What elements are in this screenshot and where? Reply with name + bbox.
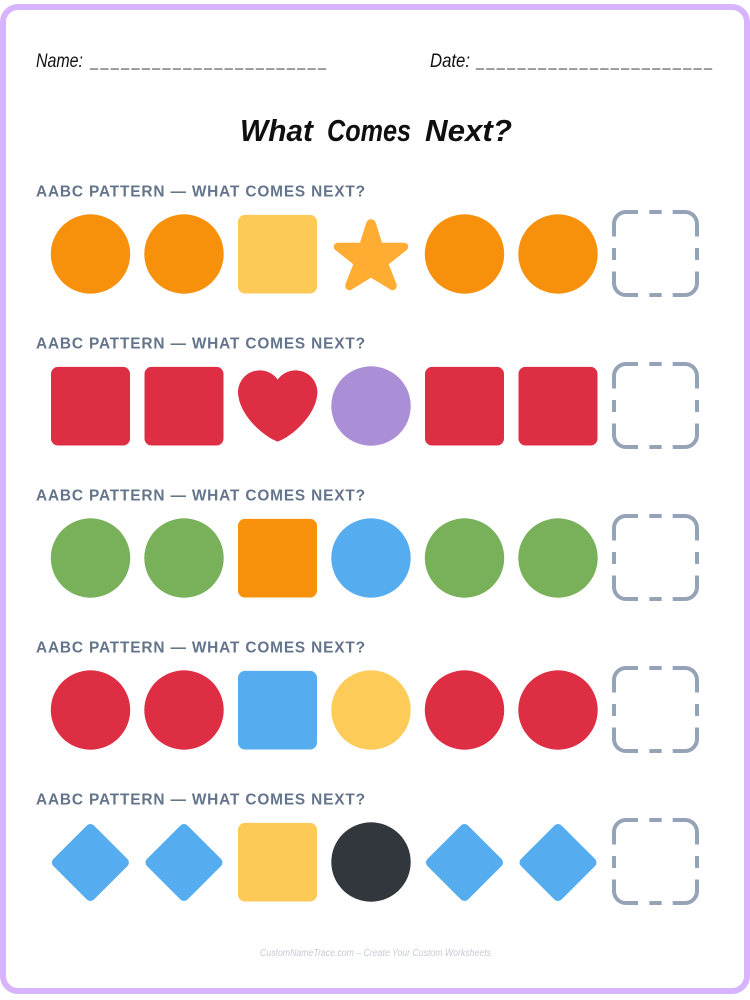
orange circle: [425, 214, 504, 294]
pattern row 4: [36, 640, 697, 751]
answer box: [614, 516, 697, 599]
blue circle: [331, 518, 411, 598]
answer box: [614, 820, 697, 903]
red circle: [425, 670, 504, 750]
name field: _______________________: [89, 54, 328, 70]
green circle: [518, 518, 598, 598]
green circle: [425, 518, 504, 598]
red circle: [51, 670, 130, 750]
green circle: [144, 518, 224, 598]
purple circle: [331, 366, 411, 446]
row label: AABC PATTERN — WHAT COMES NEXT?: [36, 184, 365, 201]
red square: [518, 367, 598, 446]
blue diamond: [143, 822, 225, 903]
title: Comes: [327, 113, 411, 148]
row label: AABC PATTERN — WHAT COMES NEXT?: [36, 336, 365, 353]
answer box: [614, 668, 697, 751]
yellow square: [238, 823, 317, 902]
title: What: [240, 113, 315, 148]
answer box: [614, 212, 697, 295]
red circle: [144, 670, 224, 750]
date field: Date:: [430, 51, 470, 72]
pattern row 1: [36, 184, 697, 295]
red heart: [238, 370, 317, 442]
orange star: [334, 219, 408, 290]
red square: [144, 367, 224, 446]
orange circle: [144, 214, 224, 294]
orange square: [238, 519, 317, 598]
red square: [51, 367, 130, 446]
answer box: [614, 364, 697, 447]
title: Next?: [425, 113, 512, 148]
row label: AABC PATTERN — WHAT COMES NEXT?: [36, 640, 365, 657]
pattern row 3: [36, 488, 697, 599]
footer: CustomNameTrace.com – Create Your Custom Worksheets: [260, 948, 491, 959]
red square: [425, 367, 504, 446]
green circle: [51, 518, 130, 598]
yellow square: [238, 215, 317, 294]
name field: Name:: [36, 51, 83, 72]
blue diamond: [424, 822, 505, 903]
row label: AABC PATTERN — WHAT COMES NEXT?: [36, 792, 365, 809]
pattern row 2: [36, 336, 697, 447]
blue diamond: [517, 822, 599, 903]
date field: [430, 51, 714, 72]
name field: [36, 51, 328, 72]
red circle: [518, 670, 598, 750]
row label: AABC PATTERN — WHAT COMES NEXT?: [36, 488, 365, 505]
orange circle: [518, 214, 598, 294]
yellow circle: [331, 670, 411, 750]
date field: _______________________: [475, 54, 714, 70]
blue square: [238, 671, 317, 750]
pattern row 5: [36, 792, 697, 903]
blue diamond: [50, 822, 131, 903]
orange circle: [51, 214, 130, 294]
black circle: [331, 822, 411, 902]
